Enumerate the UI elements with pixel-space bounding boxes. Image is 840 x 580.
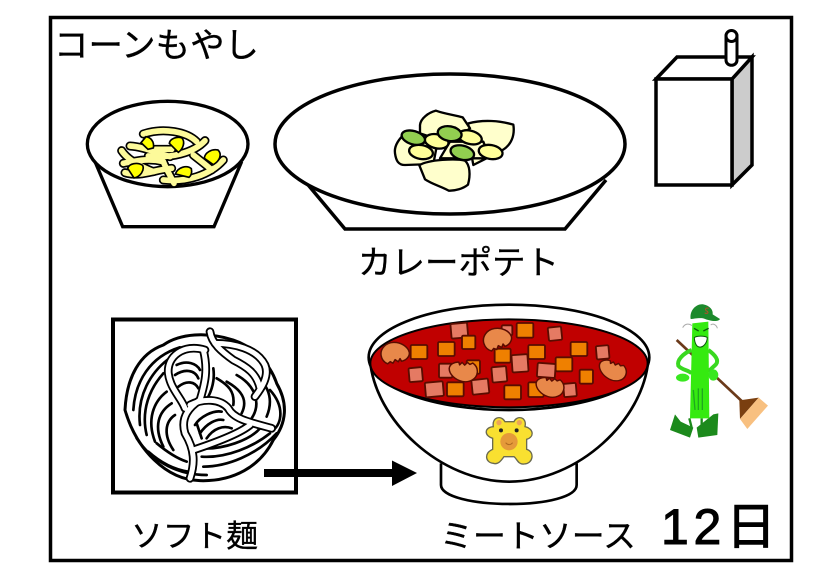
bowl body [370,360,648,482]
bowl: meat sauce [369,305,649,504]
panel: soft noodles [113,320,296,492]
icon: milk carton with straw [656,30,752,185]
arms [678,350,692,373]
mushrooms [380,341,410,364]
cap [691,304,720,321]
body [690,322,709,418]
broom [677,340,742,401]
bowl foot [441,463,577,504]
arrow: noodles to sauce [264,460,417,486]
sauce surface [370,319,648,407]
feet [670,414,693,438]
label: soft noodles: ソフト麺 [131,519,258,554]
plate base [304,180,606,229]
mascot: green vegetable with broom [670,304,768,438]
bowl rim [369,305,649,410]
face [694,336,707,347]
meat and carrot pieces [408,323,610,399]
noodle frame [113,320,296,492]
curry potato food [395,111,514,191]
label: meat sauce: ミートソース [440,518,636,554]
plate: curry potato [275,74,625,229]
bowl: corn and bean sprouts [87,101,248,227]
noodle bundle [125,332,284,481]
plate rim [275,74,625,214]
date: 12th: 12日 [661,499,776,555]
icon: yellow bear [486,418,532,464]
title: corn moyashi: コーンもやし [54,27,259,65]
label: curry potato: カレーポテト [358,244,559,281]
